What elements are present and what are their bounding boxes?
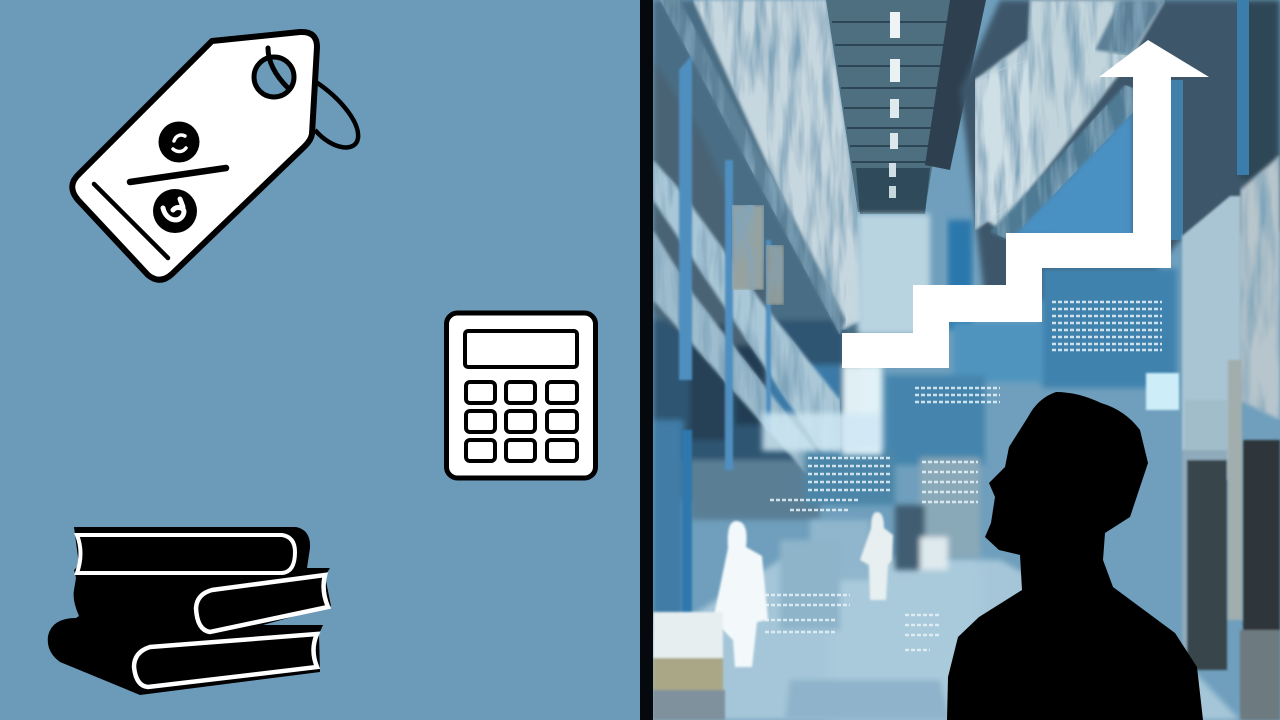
bottom left crates <box>653 612 725 720</box>
data overlay rows <box>765 302 1162 650</box>
blue rack uprights <box>1237 0 1249 175</box>
divider <box>640 0 653 720</box>
bright square screen <box>1146 373 1179 410</box>
icon: price tag <box>72 32 358 280</box>
icon: calculator <box>446 313 596 478</box>
left rack shadow blocks <box>653 0 860 620</box>
warm stock <box>732 205 764 290</box>
center data haze <box>780 375 985 630</box>
arrow: rising steps <box>842 40 1209 368</box>
icon: stack of books <box>48 527 331 695</box>
pale arrow glow <box>762 365 882 455</box>
left rack bright stock <box>693 0 862 330</box>
photo: digital warehouse aisle <box>653 0 1280 720</box>
right foreground panels <box>1182 155 1280 720</box>
panel: blue icons background <box>0 0 640 720</box>
workers <box>713 512 893 667</box>
far end of aisle <box>858 214 930 334</box>
left rack blue uprights <box>679 55 771 620</box>
floor <box>653 560 1240 720</box>
silhouette: person looking up <box>947 392 1203 720</box>
ceiling with lights <box>826 0 986 214</box>
right rack <box>953 0 1280 388</box>
